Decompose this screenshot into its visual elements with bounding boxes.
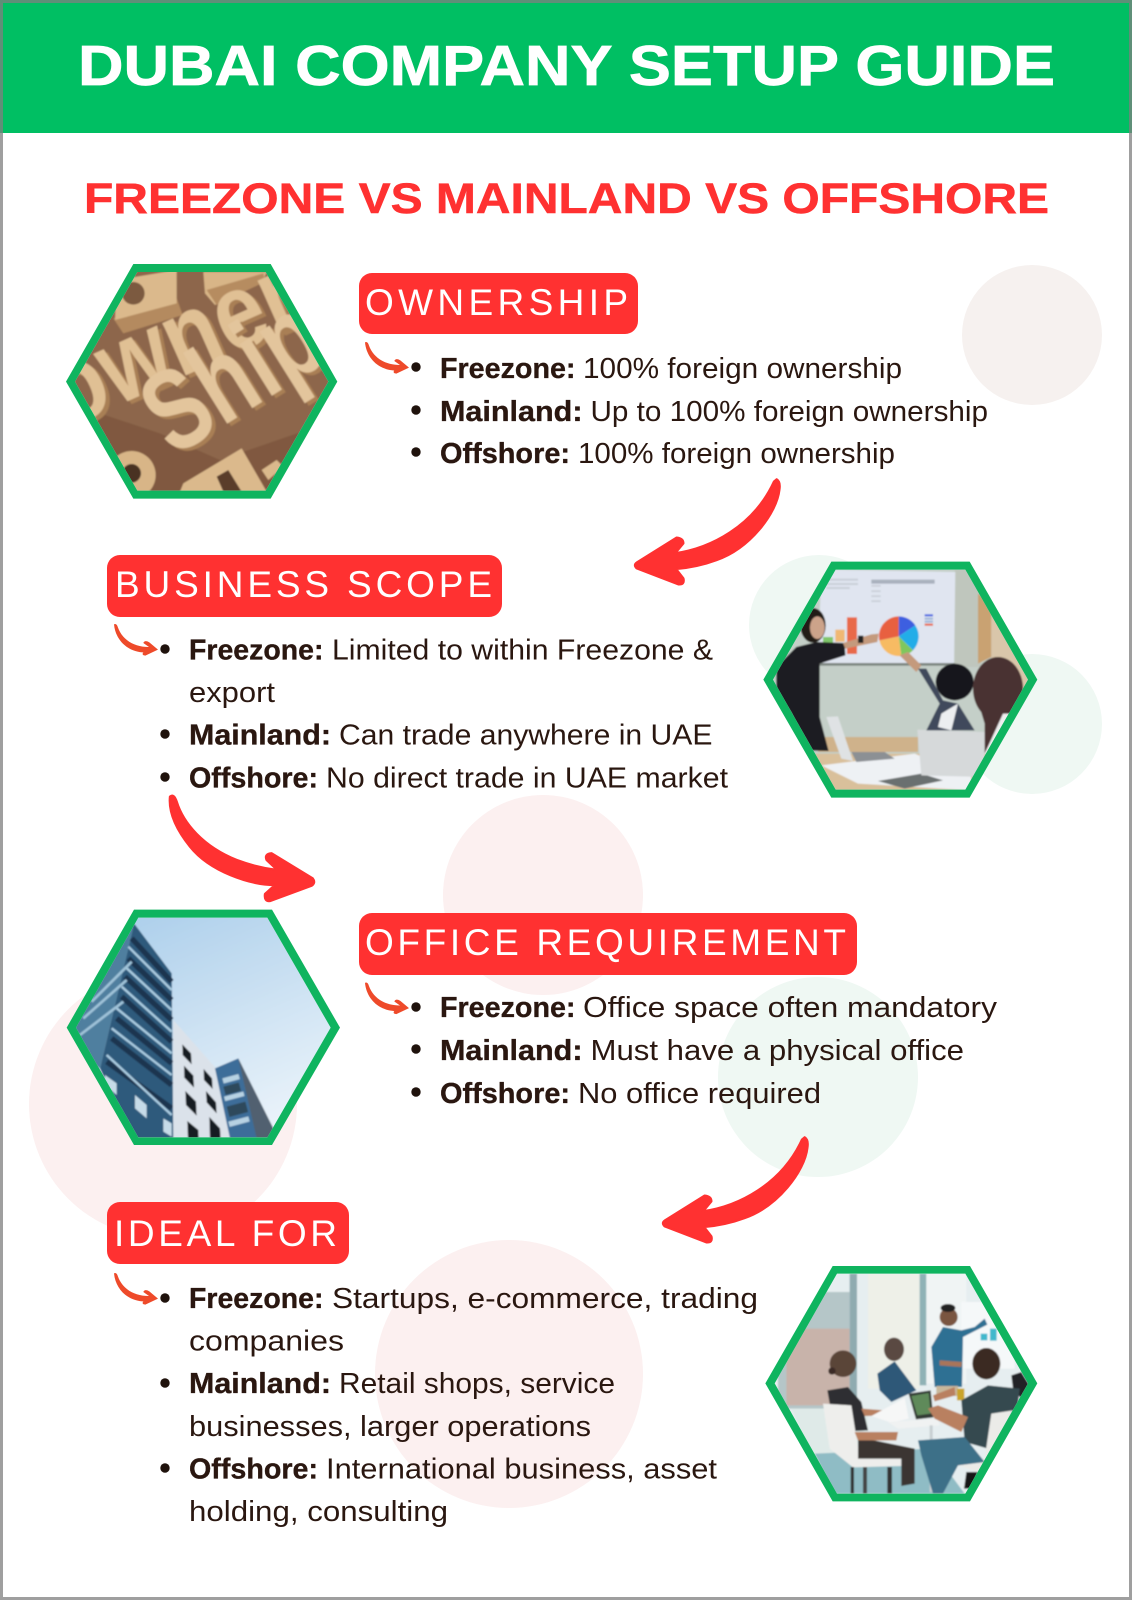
business scope badge [107,555,502,617]
business scope list: Can trade anywhere in UAE [339,720,712,752]
ideal for badge: IDEAL FOR [114,1213,337,1254]
decorative circle: green behind chart photo left [749,555,889,695]
ideal for list: Retail shops, service [339,1368,615,1400]
business scope list: Mainland: [189,720,331,752]
ideal for list: businesses, larger operations [189,1411,591,1443]
office requirement badge [359,913,857,975]
ownership list: 100% foreign ownership [578,438,895,470]
ownership list [411,353,988,470]
decorative circle: pink behind building [29,970,297,1238]
subtitle: FREEZONE VS MAINLAND VS OFFSHORE [84,175,1049,223]
ideal for list: International business, asset [326,1454,717,1486]
office requirement list: Office space often mandatory [583,992,998,1024]
ownership badge: OWNERSHIP [365,282,628,323]
small arrow: ideal for [114,1273,158,1305]
photo: wooden ownership letters: Ship [119,271,345,479]
business scope list [160,634,728,794]
business scope list: No direct trade in UAE market [326,762,728,794]
photo: wooden ownership letters: owner [27,232,317,449]
ownership list: Freezone: [440,353,576,385]
arrow: office requirement to ideal for [663,1137,808,1242]
photo: wooden ownership letters: owner [31,235,321,452]
ownership list: 100% foreign ownership [583,353,902,385]
business scope list: Offshore: [189,762,318,794]
office requirement list: No office required [578,1078,821,1110]
office requirement badge: OFFICE REQUIREMENT [365,922,846,963]
title: DUBAI COMPANY SETUP GUIDE [78,34,1055,98]
small arrow: ownership [365,342,409,374]
small arrow: business scope [114,624,158,656]
office requirement list [411,992,998,1110]
ownership list: Mainland: [440,396,582,428]
ownership list: Up to 100% foreign ownership [590,396,988,428]
header banner [0,0,1132,133]
ideal for list: companies [189,1326,344,1358]
office requirement list: Freezone: [440,992,576,1024]
photo: wooden ownership letters: Ship [123,274,349,481]
decorative circle: green behind chart photo right [962,654,1102,794]
photo: office building [60,905,345,1150]
small arrow: office requirement [365,983,409,1014]
ownership list: Offshore: [440,438,570,470]
ideal for list: Mainland: [189,1368,331,1400]
ideal for list [160,1283,758,1528]
office requirement list: Offshore: [440,1078,570,1110]
arrow: ownership to business scope [635,479,780,584]
decorative circle: beige top right [962,265,1102,405]
ideal for list: Offshore: [189,1454,318,1486]
decorative circle: pink behind ideal for list [375,1240,643,1508]
ideal for list: Freezone: [189,1283,324,1315]
decorative circle: green right of office list [718,977,918,1177]
business scope list: Freezone: [189,634,324,666]
business scope badge: BUSINESS SCOPE [115,564,492,605]
photo: team presenting a chart [758,557,1043,802]
photo: wooden ownership letters [66,264,338,499]
office requirement list: Mainland: [440,1035,582,1067]
business scope list: export [189,677,275,709]
business scope list: Limited to within Freezone & [332,634,713,666]
ideal for list: Startups, e-commerce, trading [332,1283,758,1315]
office requirement list: Must have a physical office [590,1035,964,1067]
decorative circle: pink centre [443,795,643,995]
photo: team meeting in office [758,1262,1043,1507]
arrow: business scope to office requirement [170,796,314,901]
ideal for list: holding, consulting [189,1496,448,1528]
ideal for badge [107,1202,349,1264]
ownership badge [359,273,638,334]
